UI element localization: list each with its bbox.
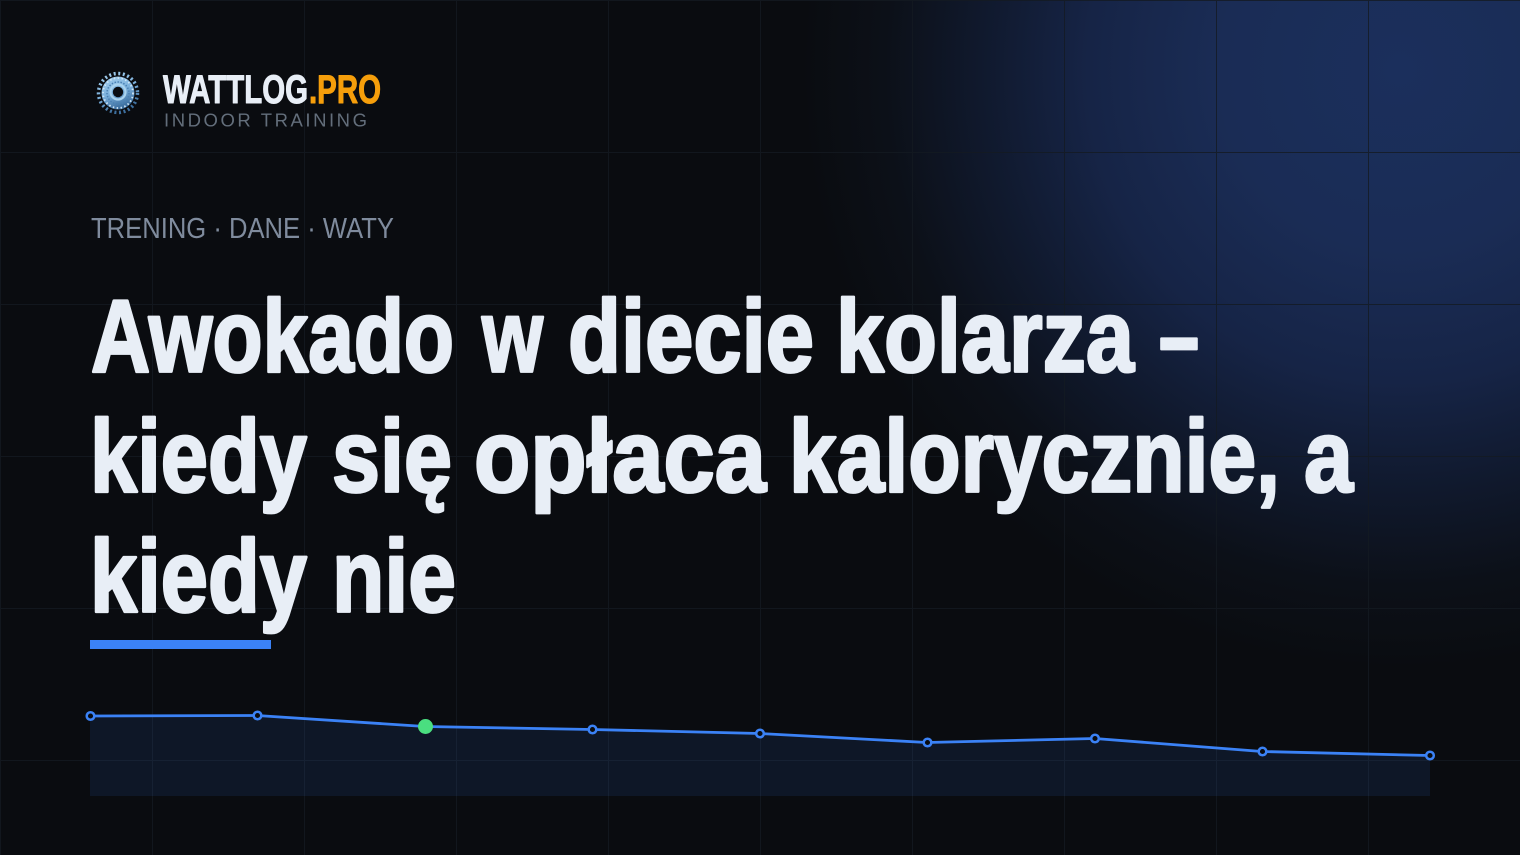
title line 2 — [90, 398, 1354, 514]
title line 2: kiedy — [90, 398, 307, 514]
title line 1: – — [1159, 278, 1199, 394]
title line 1: w — [481, 278, 544, 394]
title line 1: kolarza — [836, 278, 1135, 394]
highlighted point — [418, 719, 433, 734]
eyebrow: TRENING · DANE · WATY — [91, 213, 394, 245]
title — [90, 278, 1354, 634]
title line 3: kiedy — [90, 518, 307, 634]
title line 1: Awokado — [91, 278, 454, 394]
data points — [87, 712, 1434, 759]
line chart — [87, 712, 1434, 796]
title line 1: diecie — [568, 278, 814, 394]
chart area — [90, 716, 1430, 796]
title line 2: się — [332, 398, 452, 514]
title line 2: kalorycznie, — [789, 398, 1280, 514]
title line 1 — [91, 278, 1199, 394]
tagline: INDOOR TRAINING — [164, 110, 367, 130]
chart line — [90, 716, 1430, 756]
title line 2: a — [1304, 398, 1354, 514]
title line 2: opłaca — [474, 398, 767, 514]
title line 3: nie — [332, 518, 456, 634]
logo — [98, 68, 381, 130]
wordmark: .PRO — [309, 68, 381, 112]
wordmark: WATTLOG — [163, 68, 308, 112]
icon: cassette gear — [98, 74, 138, 112]
title underline — [90, 640, 271, 649]
